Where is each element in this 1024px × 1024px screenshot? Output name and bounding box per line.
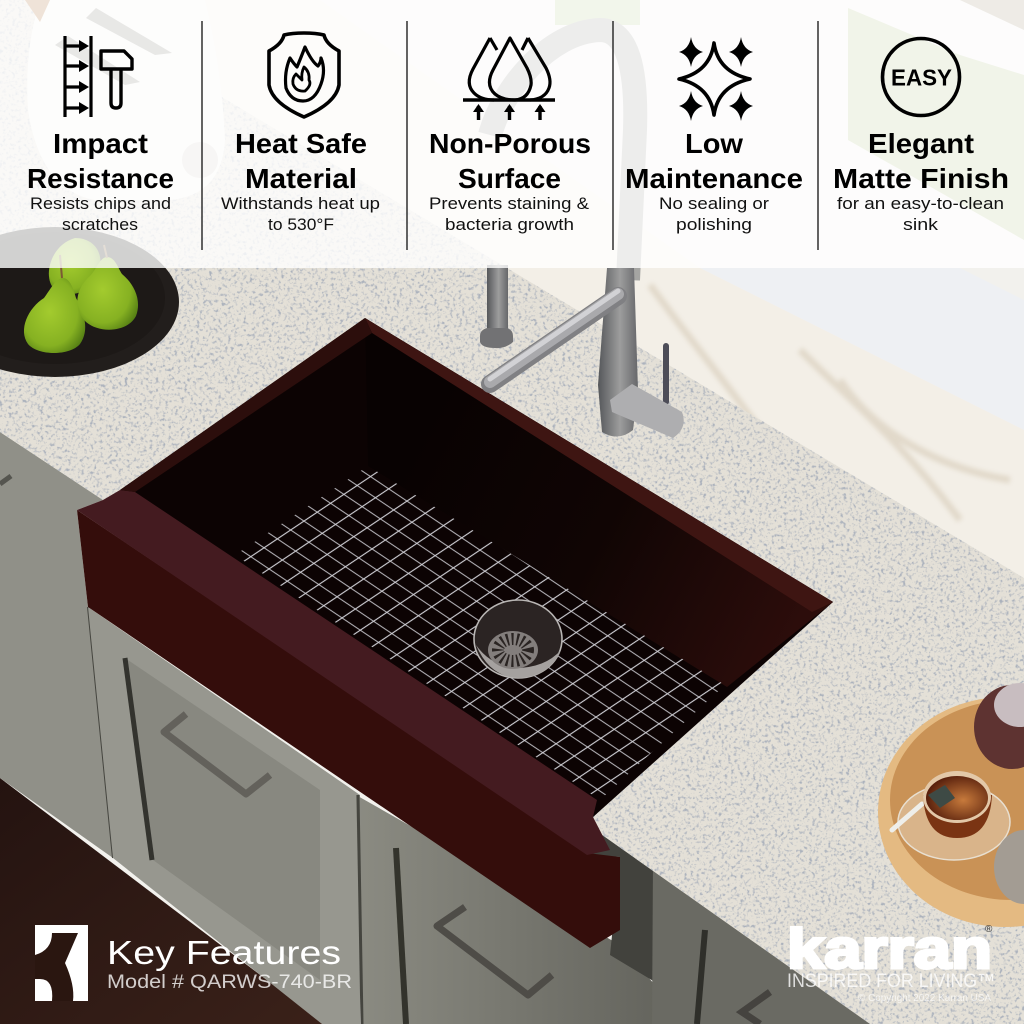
description: for an easy-to-clean: [837, 195, 1004, 213]
wooden tray with tea: [878, 683, 1024, 927]
heading: Surface: [458, 163, 561, 194]
marble backsplash: [60, 0, 1024, 578]
body: [598, 268, 638, 437]
pears on dark plate: [0, 227, 179, 377]
cabinet: left: [0, 432, 113, 858]
wire rack: [235, 466, 725, 800]
description: Withstands heat up: [221, 195, 380, 213]
tea glass: [994, 830, 1024, 904]
feature: heat safe material: [221, 33, 380, 234]
heading: Resistance: [27, 163, 174, 194]
karran logo: karran: [787, 917, 992, 980]
basin interior: [120, 318, 833, 817]
icon: sparkles: [679, 37, 753, 121]
feature: elegant matte finish: [833, 38, 1009, 234]
saucer: [898, 784, 1010, 860]
heading: Impact: [53, 128, 148, 159]
description: polishing: [676, 216, 752, 234]
feature: non-porous surface: [429, 38, 591, 234]
description: bacteria growth: [445, 216, 574, 234]
feature: low maintenance: [625, 37, 803, 234]
description: Resists chips and: [30, 195, 171, 213]
icon: flame shield: [269, 33, 339, 117]
icon: droplets on surface: [463, 38, 555, 120]
soap dispenser: [480, 265, 513, 348]
handle: [164, 714, 270, 794]
toaster: [25, 0, 225, 200]
coil hose: [490, 30, 635, 280]
key features title: Key Features: [107, 934, 341, 971]
heading: Heat Safe: [235, 128, 367, 159]
window with garden view: [555, 0, 1024, 240]
icon: easy badge: EASY: [891, 64, 952, 90]
description: sink: [903, 216, 939, 234]
cabinet: centre door: [88, 607, 360, 1024]
cabinet: shadowed side panel: [587, 810, 660, 985]
faucet: [490, 30, 684, 438]
tagline: INSPIRED FOR LIVING™: [787, 971, 995, 992]
heading: Matte Finish: [833, 163, 1009, 194]
key features title: [107, 934, 352, 993]
spoon: [892, 804, 922, 830]
apron front: [77, 510, 620, 948]
icon: easy badge: [882, 38, 960, 116]
handle: [437, 907, 552, 995]
brand mark: [35, 925, 88, 1001]
feature: impact resistance: [27, 36, 174, 234]
dividers: [202, 21, 818, 250]
description: scratches: [62, 216, 138, 234]
description: No sealing or: [659, 195, 770, 213]
rim steps: [365, 318, 833, 612]
tea cup: [923, 771, 992, 838]
cabinet: drawer door: [356, 795, 655, 1024]
lever: [663, 346, 669, 402]
karran logo: [787, 917, 995, 1004]
heading: Maintenance: [625, 163, 803, 194]
heading: Material: [245, 163, 357, 194]
cabinet: right: [652, 862, 880, 1024]
icon: wall and hammer: [65, 36, 132, 117]
heading: Low: [685, 128, 743, 159]
spout: [490, 291, 618, 384]
heading: Elegant: [868, 128, 974, 159]
window sill and frame: [700, 268, 1024, 430]
copyright: © Copyright 2022 Karran USA: [858, 993, 991, 1004]
apron top rim: [77, 490, 610, 855]
registered mark: ®: [985, 924, 993, 935]
heading: Non-Porous: [429, 128, 591, 159]
description: to 530°F: [268, 216, 334, 234]
white top banner overlay: [0, 0, 1024, 268]
glass teapot: [974, 683, 1024, 769]
floor: [0, 778, 325, 1024]
drain strainer: [474, 600, 562, 678]
handle: [742, 992, 770, 1024]
model number: Model # QARWS-740-BR: [107, 972, 352, 993]
right wall: [365, 318, 833, 687]
description: Prevents staining &: [429, 195, 589, 213]
handle: [610, 384, 684, 438]
farmhouse sink: [77, 318, 833, 948]
